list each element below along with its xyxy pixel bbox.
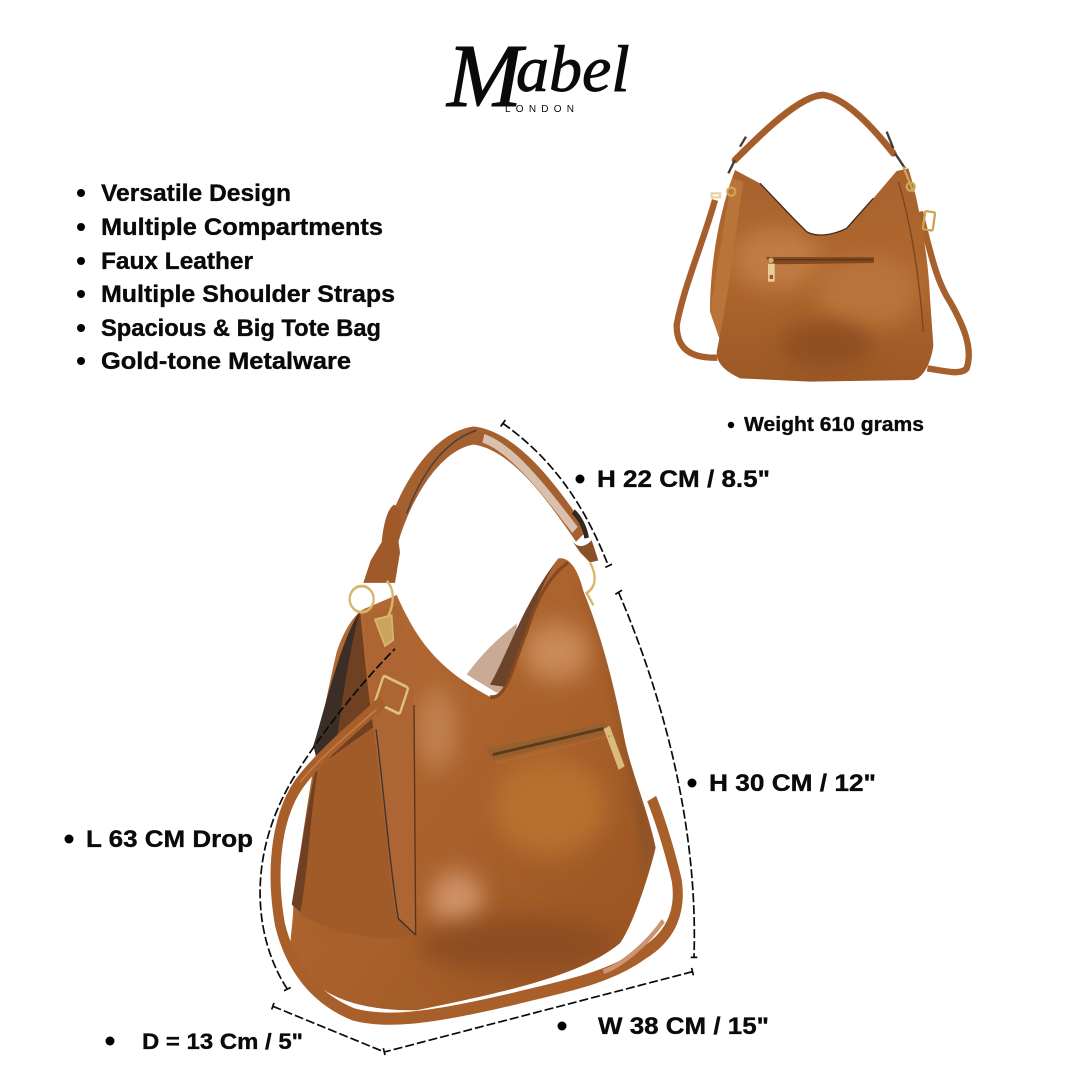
feature: Spacious & Big Tote Bag: Spacious & Big Tote Bag [101,315,381,342]
feature list [77,180,395,375]
label: body height: H 30 CM / 12" [709,770,876,797]
small bag zipper [766,257,874,264]
large bag handle tab [363,505,401,583]
feature: Multiple Shoulder Straps: Multiple Shoulder Straps [101,281,395,308]
large bag dark gusset edge [292,611,373,915]
large bag body [290,558,656,1010]
dimension line: depth [272,1003,384,1052]
logo: Mabel London: abel [516,33,630,106]
dimension line: width [383,968,693,1055]
large bag gusset panel [300,727,415,938]
large bag opening seam [490,562,568,697]
large bag side tab [363,605,416,935]
dimension line: strap drop [260,649,395,991]
large bag right loop [572,540,598,562]
feature: Faux Leather: Faux Leather [101,248,253,275]
large bag shoulder strap [276,701,678,1019]
large bag pocket zipper [486,723,622,768]
logo: Mabel London: LONDON [505,104,577,115]
small bag opening shadow [760,183,873,235]
small bag hardware [712,167,935,231]
label: width: W 38 CM / 15" [598,1013,769,1040]
large bag handle [386,430,587,560]
feature: Multiple Compartments: Multiple Compartments [101,214,383,241]
feature: Gold-tone Metalware: Gold-tone Metalware [101,348,351,375]
weight note: Weight 610 grams [744,414,924,436]
large bag photo: three-quarter view [276,430,678,1019]
label: depth: D = 13 Cm / 5" [142,1029,303,1054]
label: strap drop: L 63 CM Drop [86,826,253,853]
logo: Mabel London [445,27,630,126]
small bag body [710,168,933,382]
large bag hardware: rings, clasp and buckle [350,562,595,714]
small bag zipper pull [768,258,775,282]
small bag handle [735,95,893,160]
feature: Versatile Design: Versatile Design [101,180,291,207]
small bag right strap [920,212,969,372]
dimension line: body height [615,590,697,957]
small bag photo: back view [677,95,969,382]
small bag left strap [677,200,717,358]
label: handle height: H 22 CM / 8.5" [597,466,770,493]
dimension line: handle height [501,420,612,567]
large bag inner back panel [467,624,517,693]
logo: Mabel London: M [445,27,527,126]
dimension lines [260,420,697,1055]
